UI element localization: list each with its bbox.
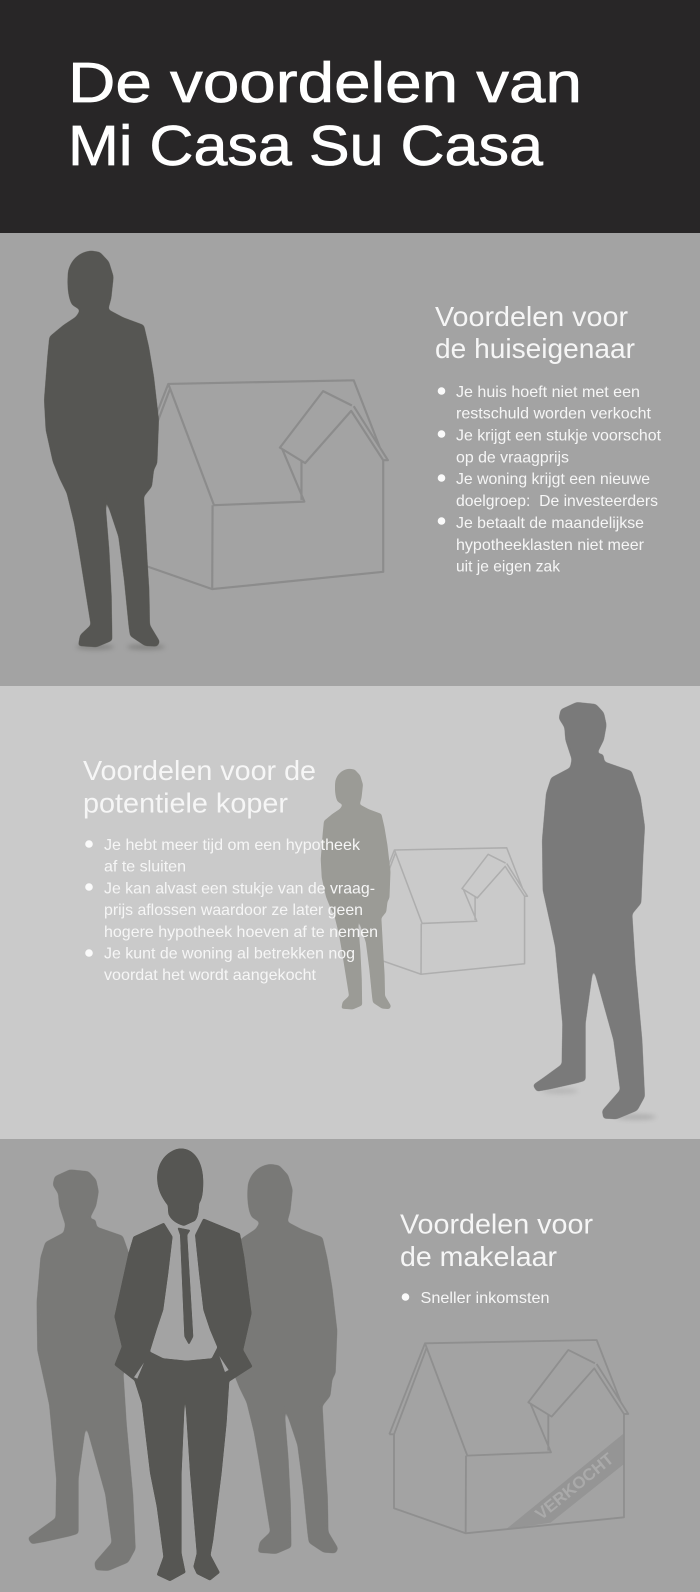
heading: potentiele koper: Voordelen voor de xyxy=(83,755,316,786)
list: koper benefits: hogere hypotheek hoeven af te nemen xyxy=(104,924,378,941)
list: huiseigenaar benefits: op de vraagprijs xyxy=(456,450,569,466)
list: koper benefits: voordat het wordt aangekocht xyxy=(104,967,317,984)
list: huiseigenaar benefits: uit je eigen zak xyxy=(456,558,561,576)
list: huiseigenaar benefits: Je krijgt een stukje voorschot xyxy=(456,428,662,444)
heading: huiseigenaar: de huiseigenaar xyxy=(435,333,635,364)
figure: right man silhouette xyxy=(224,1164,338,1554)
heading: makelaar: Voordelen voor xyxy=(400,1208,593,1240)
list: huiseigenaar benefits: doelgroep: De investeerders xyxy=(456,493,658,510)
list: huiseigenaar benefits: hypotheeklasten niet meer xyxy=(456,537,645,554)
list: huiseigenaar benefits: Je betaalt de maandelijkse xyxy=(456,515,644,532)
header: title band xyxy=(0,0,700,233)
title: De voordelen van xyxy=(68,51,582,115)
list: koper benefits: af te sluiten xyxy=(104,858,186,876)
heading: huiseigenaar xyxy=(435,301,635,364)
figure: distant man silhouette xyxy=(321,769,391,1009)
title: Mi Casa Su Casa xyxy=(68,114,543,178)
heading: makelaar: de makelaar xyxy=(400,1241,557,1272)
list: koper benefits: prijs aflossen waardoor ze later geen xyxy=(104,902,363,919)
icon: small house outline xyxy=(371,848,527,974)
heading: potentiele koper: potentiele koper xyxy=(83,788,288,818)
heading: potentiele koper xyxy=(83,755,316,818)
icon: house with verkocht banner xyxy=(389,1340,628,1533)
title xyxy=(68,51,582,178)
list: koper benefits xyxy=(85,837,378,984)
label: verkocht: VERKOCHT xyxy=(532,1449,617,1524)
figure: standing man silhouette xyxy=(44,251,165,650)
list: koper benefits: Je kan alvast een stukje van de vraag- xyxy=(104,880,375,898)
figure: central man in suit xyxy=(114,1148,253,1581)
heading: makelaar xyxy=(400,1208,593,1272)
figure: large man silhouette xyxy=(533,702,656,1120)
list: huiseigenaar benefits xyxy=(438,384,662,576)
icon: house outline xyxy=(130,380,388,589)
list: huiseigenaar benefits: Je huis hoeft niet met een xyxy=(456,384,640,401)
list: huiseigenaar benefits: restschuld worden verkocht xyxy=(456,406,652,422)
list: koper benefits: Je kunt de woning al betrekken nog xyxy=(104,946,355,962)
list: makelaar benefits: Sneller inkomsten xyxy=(420,1290,550,1307)
panel: voordelen voor de huiseigenaar xyxy=(0,233,700,686)
heading: huiseigenaar: Voordelen voor xyxy=(435,301,628,332)
list: koper benefits: Je hebt meer tijd om een hypotheek xyxy=(104,837,361,854)
list: huiseigenaar benefits: Je woning krijgt een nieuwe xyxy=(456,471,650,488)
figure: left man silhouette xyxy=(28,1169,136,1571)
panel: voordelen voor de potentiele koper xyxy=(0,686,700,1139)
panel: voordelen voor de makelaar xyxy=(0,1139,700,1592)
